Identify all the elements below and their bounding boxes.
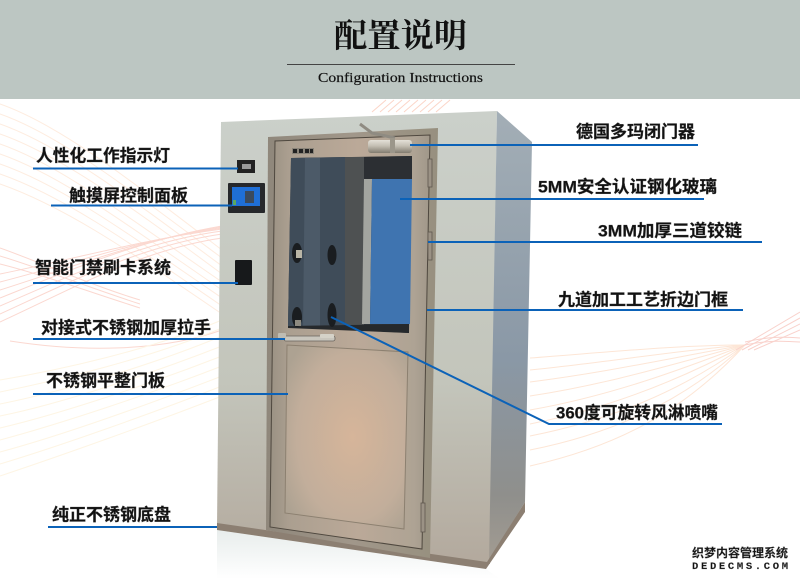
title: 配置说明 bbox=[334, 18, 467, 55]
label: tempered glass: 5MM安全认证钢化玻璃 bbox=[538, 176, 717, 196]
watermark: DEDECMS.COM bbox=[692, 561, 788, 573]
label: base: 纯正不锈钢底盘 bbox=[52, 504, 171, 524]
background waves bbox=[0, 100, 800, 476]
touch screen bbox=[228, 183, 265, 213]
label: nozzle bbox=[331, 317, 722, 424]
label: handle: 对接式不锈钢加厚拉手 bbox=[41, 318, 211, 338]
label: door panel: 不锈钢平整门板 bbox=[46, 372, 165, 390]
header band bbox=[0, 0, 800, 99]
door leaf bbox=[270, 135, 430, 549]
label: access card system: 智能门禁刷卡系统 bbox=[35, 258, 171, 278]
left labels bbox=[33, 146, 288, 527]
label: hinges: 3MM加厚三道铰链 bbox=[598, 220, 742, 240]
watermark: 织梦内容管理系统 bbox=[692, 545, 788, 560]
cabinet front face bbox=[217, 111, 497, 564]
label: touch panel: 触摸屏控制面板 bbox=[69, 186, 188, 206]
watermark bbox=[692, 545, 788, 573]
cabinet side face bbox=[487, 111, 532, 563]
air nozzles bbox=[292, 243, 336, 327]
label: nozzle: 360度可旋转风淋喷嘴 bbox=[556, 402, 718, 422]
subtitle: Configuration Instructions bbox=[318, 71, 483, 86]
door logo plate bbox=[292, 148, 314, 154]
indicator light bbox=[237, 160, 255, 173]
window bbox=[288, 156, 412, 333]
floor reflection bbox=[217, 530, 500, 579]
stainless steel base bbox=[217, 502, 525, 569]
door frame bbox=[266, 128, 438, 558]
stainless steel door panel bbox=[285, 345, 408, 529]
label: door closer: 德国多玛闭门器 bbox=[576, 122, 695, 142]
right labels bbox=[331, 122, 762, 424]
label: door frame: 九道加工工艺折边门框 bbox=[558, 290, 728, 310]
label: indicator light: 人性化工作指示灯 bbox=[36, 146, 170, 166]
card reader bbox=[235, 260, 252, 285]
handle bbox=[278, 333, 335, 341]
hinges bbox=[421, 159, 432, 532]
door closer bbox=[360, 124, 412, 153]
air shower cabinet bbox=[217, 111, 532, 569]
